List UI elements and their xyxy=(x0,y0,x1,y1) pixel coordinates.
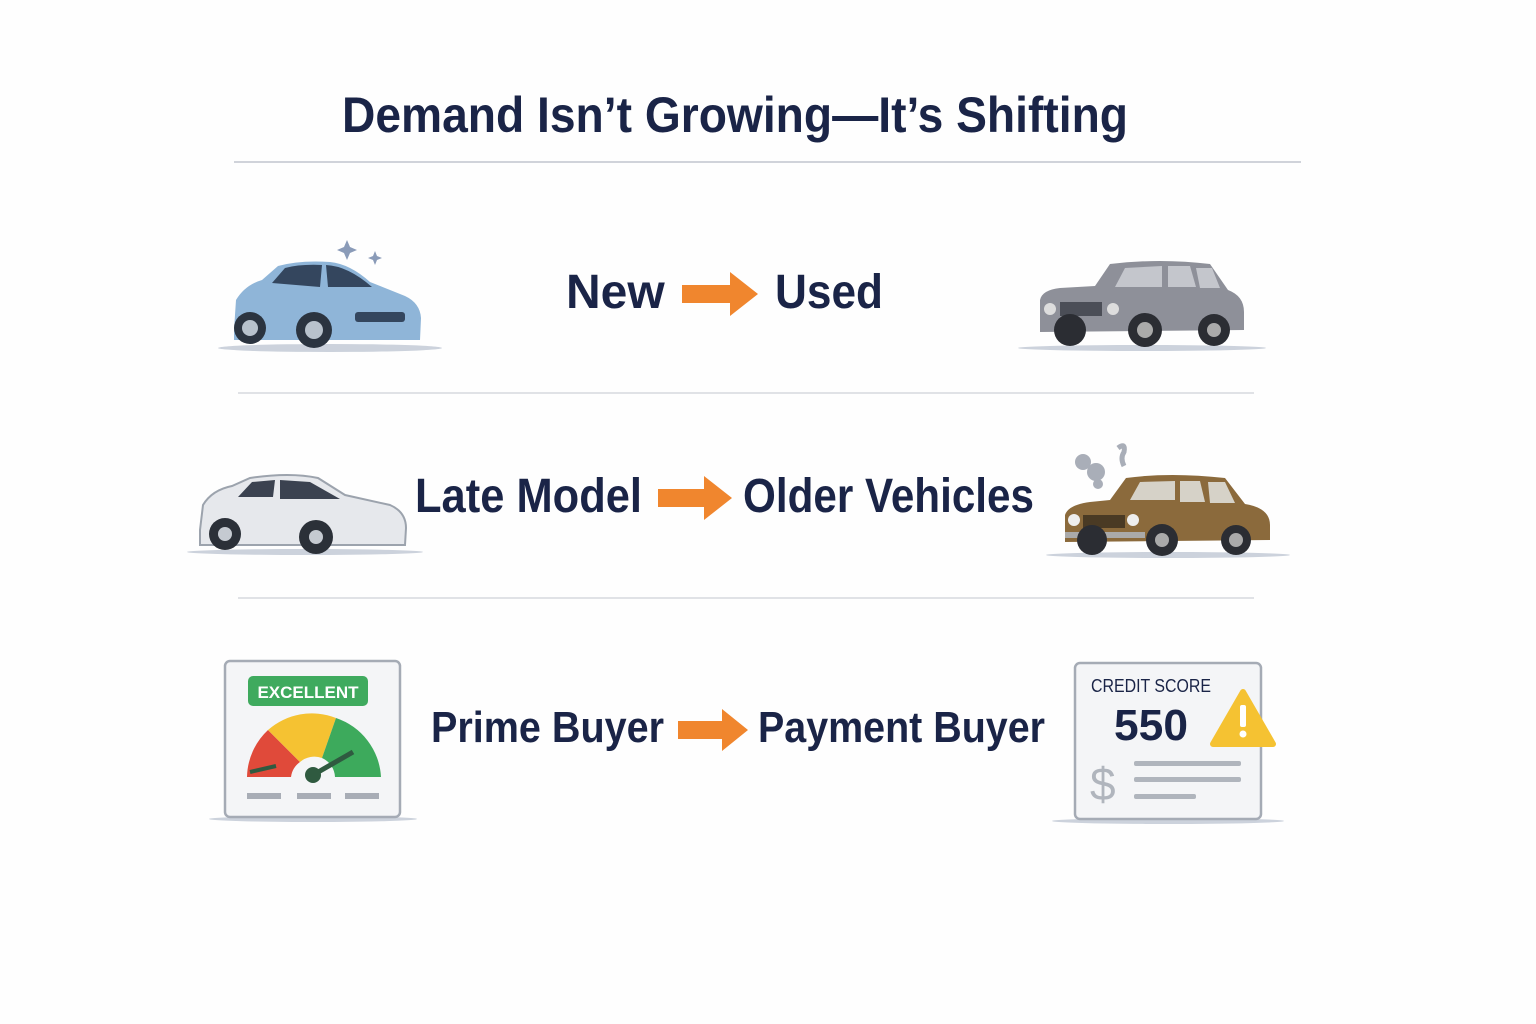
icon: new blue car xyxy=(218,240,442,352)
label: Prime Buyer: Prime Buyer xyxy=(431,703,664,752)
label: Late Model: Late Model xyxy=(415,470,642,523)
row 2: late model to older xyxy=(187,446,1290,558)
icon: used gray car xyxy=(1018,261,1266,351)
row 1: new to used xyxy=(218,240,1266,352)
label: Used: Used xyxy=(775,266,883,319)
icon: credit score 550 card: $ xyxy=(1090,758,1116,810)
icon: credit score 550 card xyxy=(1052,663,1284,824)
icon: credit score 550 card: CREDIT SCORE xyxy=(1091,676,1211,696)
label: New: New xyxy=(566,266,665,319)
arrow xyxy=(658,476,732,520)
icon: brown older car with smoke xyxy=(1046,446,1290,558)
icon: excellent credit gauge card xyxy=(209,661,417,822)
icon: credit score 550 card: 550 xyxy=(1114,701,1188,750)
row 3: prime to payment buyer xyxy=(209,661,1284,824)
icon: white late model car xyxy=(187,475,423,555)
label: Payment Buyer: Payment Buyer xyxy=(758,703,1045,752)
label: Older Vehicles: Older Vehicles xyxy=(743,470,1034,523)
title: Demand Isn’t Growing—It’s Shifting xyxy=(342,87,1128,143)
icon: excellent credit gauge card: EXCELLENT xyxy=(257,683,359,702)
arrow xyxy=(678,709,748,751)
arrow xyxy=(682,272,758,316)
